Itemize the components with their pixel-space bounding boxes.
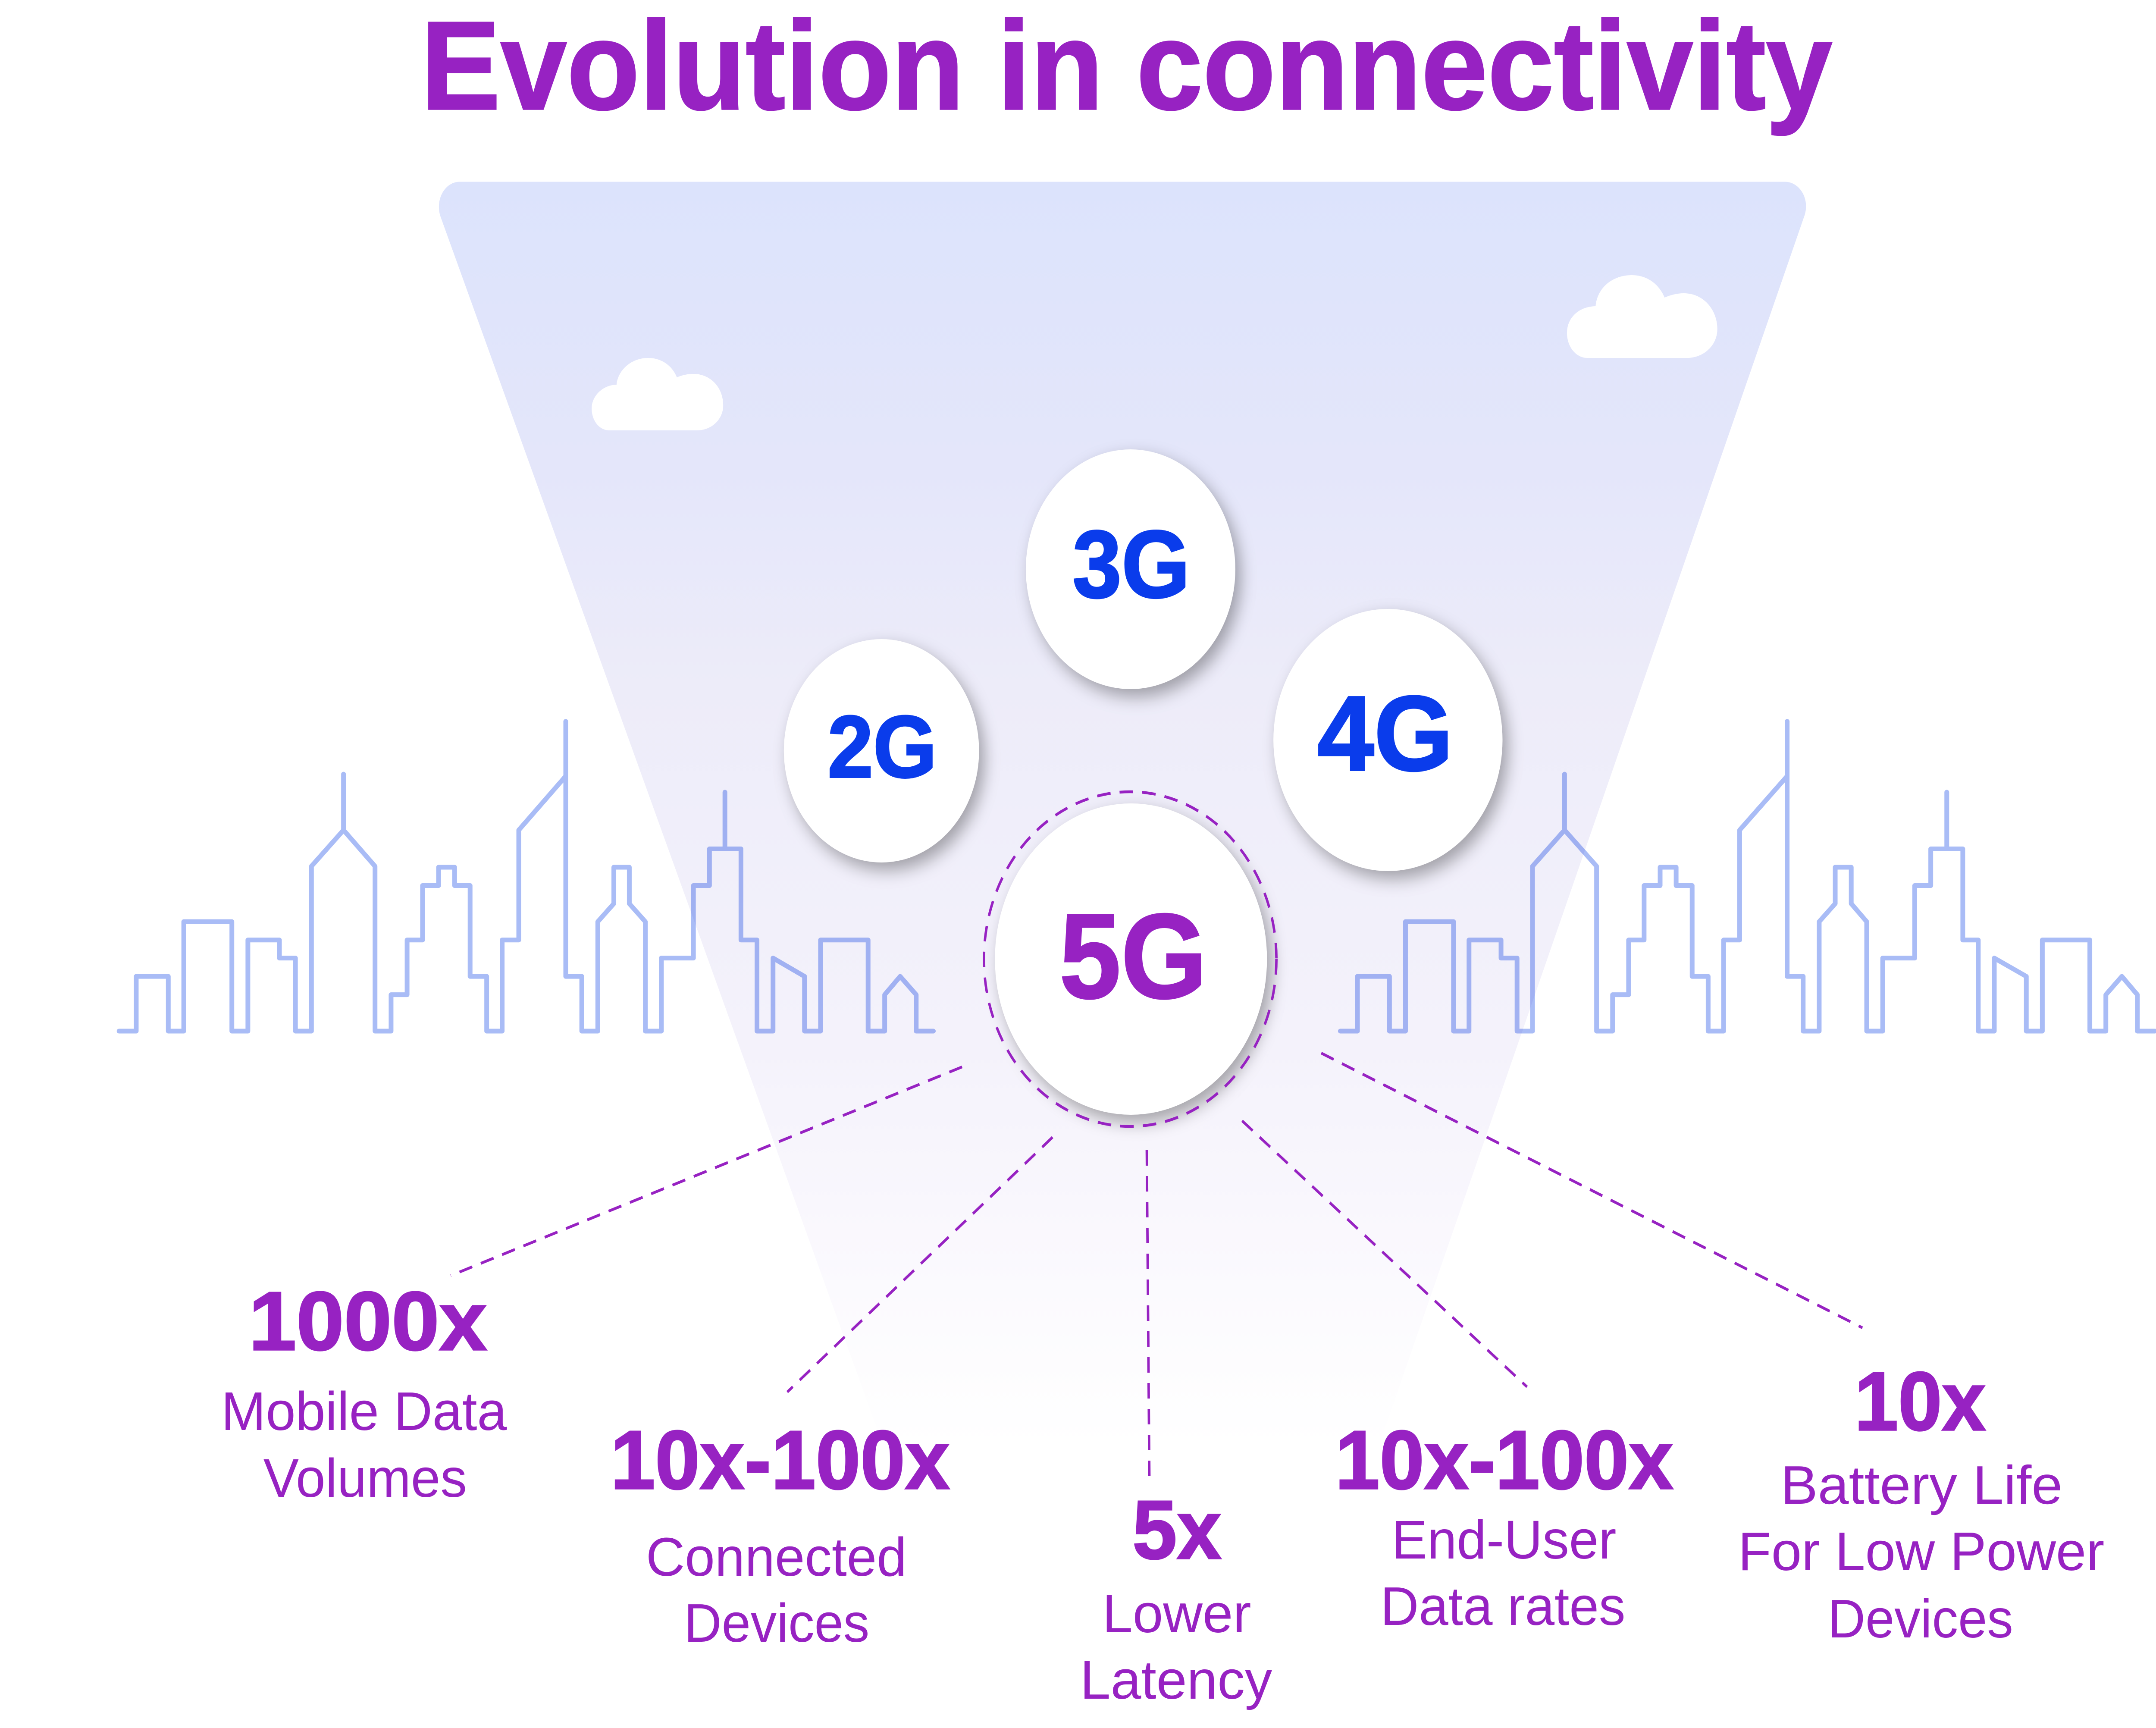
connector: lower latency [1147,1150,1150,1483]
icon: left cloud [592,358,723,430]
stat: 10x-100x end-user data rates: Data rates [1380,1576,1625,1637]
funnel background [439,182,1806,1466]
stat: 10x battery life: 10x [1855,1355,1986,1448]
left city skyline [119,721,933,1031]
stat: 10x battery life [1738,1355,2104,1650]
stat: 1000x mobile data volumes: Volumes [263,1448,467,1509]
icon: right cloud [1567,275,1717,358]
stat: 10x-100x connected devices [611,1414,950,1654]
stat: 5x lower latency [1080,1483,1272,1711]
4G badge [1273,609,1503,871]
2G badge [784,639,979,862]
stat: 10x-100x end-user data rates: End-User [1392,1510,1616,1571]
connector: connected devices [787,1137,1053,1392]
stat: 1000x mobile data volumes [221,1275,507,1509]
stat: 10x battery life: For Low Power [1738,1521,2104,1582]
stat: 1000x mobile data volumes: Mobile Data [221,1381,507,1442]
stat: 5x lower latency: Latency [1080,1650,1272,1711]
stat: 10x-100x connected devices: 10x-100x [611,1414,950,1507]
connector: battery life [1321,1053,1862,1328]
2G badge: 2G [827,698,937,796]
3G badge: 3G [1072,511,1190,618]
stat: 10x-100x connected devices: Connected [646,1527,907,1588]
stat: 5x lower latency: Lower [1102,1584,1251,1644]
stat: 10x-100x end-user data rates [1335,1414,1673,1637]
stat: 10x battery life: Battery Life [1781,1455,2062,1516]
connector: end-user data rates [1242,1121,1527,1387]
stat: 10x battery life: Devices [1828,1589,2013,1650]
dashed ring around 5G [984,792,1276,1126]
stat: 5x lower latency: 5x [1132,1483,1222,1577]
stat: 10x-100x end-user data rates: 10x-100x [1335,1414,1673,1507]
5G badge: 5G [1059,889,1207,1024]
stat: 1000x mobile data volumes: 1000x [249,1275,487,1368]
right city skyline [1340,721,2155,1031]
stat: 10x-100x connected devices: Devices [684,1593,869,1654]
5G badge [995,803,1267,1115]
3G badge [1026,449,1235,689]
4G badge: 4G [1317,674,1453,793]
connector: mobile data volumes [451,1067,962,1276]
